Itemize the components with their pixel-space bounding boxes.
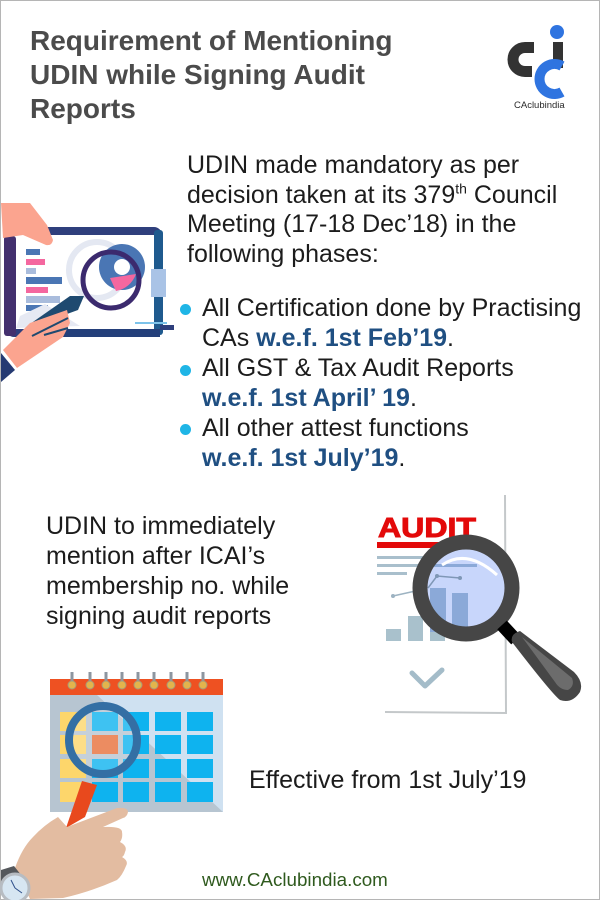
phases list: w.e.f. 1st July’19. — [202, 444, 405, 472]
title: Requirement of Mentioning — [30, 25, 392, 56]
effective date text: Effective from 1st July’19 — [249, 766, 526, 794]
phases list: w.e.f. 1st April’ 19. — [202, 384, 417, 412]
audit membership text — [46, 512, 289, 630]
audit membership text: mention after ICAI’s — [46, 542, 265, 570]
hand top — [1, 203, 53, 245]
phases list: All GST & Tax Audit Reports — [202, 354, 514, 382]
icon: calendar with magnifier and hand — [1, 672, 223, 900]
audit membership text: signing audit reports — [46, 602, 271, 630]
sleeve — [1, 353, 15, 382]
logo icon — [513, 25, 564, 94]
phases list: CAs w.e.f. 1st Feb’19. — [202, 324, 454, 352]
title: Reports — [30, 93, 136, 124]
icon: audit report with magnifier — [377, 495, 581, 713]
intro text block: following phases: — [187, 240, 379, 268]
intro text block: UDIN made mandatory as per — [187, 151, 519, 179]
title — [30, 25, 392, 124]
audit membership text: membership no. while — [46, 572, 289, 600]
logo caption: CAclubindia — [514, 100, 565, 111]
phases list — [180, 294, 581, 472]
title: UDIN while Signing Audit — [30, 59, 365, 90]
icon: audit report with magnifier: AUDIT — [378, 512, 476, 543]
phases list: All other attest functions — [202, 414, 469, 442]
audit membership text: UDIN to immediately — [46, 512, 275, 540]
intro text block — [187, 151, 557, 268]
icon: clipboard with magnifier — [1, 203, 174, 382]
website footer: www.CAclubindia.com — [202, 869, 388, 890]
intro text block: decision taken at its 379th Council — [187, 180, 557, 209]
phases list: All Certification done by Practising — [202, 294, 581, 322]
hand bottom — [3, 310, 70, 368]
intro text block: Meeting (17-18 Dec’18) in the — [187, 210, 516, 238]
